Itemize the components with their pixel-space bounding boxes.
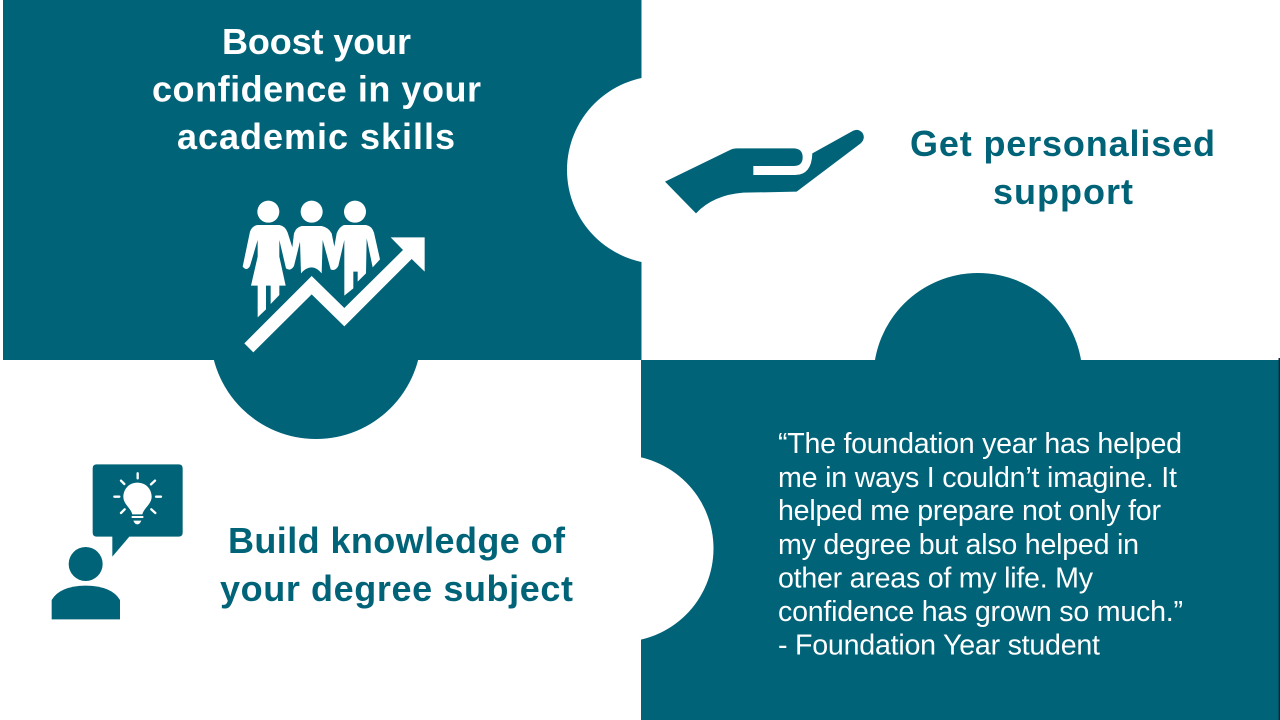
icon: person with lightbulb idea: [52, 464, 183, 619]
quote text: my degree but also helped in: [778, 529, 1139, 561]
quote text: helped me prepare not only for: [778, 495, 1161, 527]
quote text: me in ways I couldn’t imagine. It: [778, 462, 1177, 494]
quote text: other areas of my life. My: [778, 562, 1094, 594]
quote text: - Foundation Year student: [778, 630, 1100, 662]
icon: open hand: [665, 130, 864, 213]
heading: boost your confidence: academic skills: [177, 116, 455, 157]
lightbulb: [114, 473, 161, 524]
heading: personalised support: support: [993, 171, 1133, 212]
person: [52, 547, 120, 619]
heading: boost your confidence: confidence in your: [152, 68, 481, 110]
speech bubble: [93, 464, 183, 557]
quote text: confidence has grown so much.”: [778, 596, 1183, 628]
heading: boost your confidence: [152, 21, 481, 157]
panel: quote (bottom right): [526, 273, 1280, 720]
panel: confidence (top left): [3, 0, 755, 439]
heading: build knowledge: Build knowledge of: [228, 520, 566, 561]
heading: personalised support: Get personalised: [910, 123, 1215, 164]
heading: boost your confidence: Boost your: [222, 21, 411, 62]
heading: build knowledge: your degree subject: [220, 568, 573, 609]
quote text: “The foundation year has helped: [778, 428, 1182, 460]
heading: personalised support: [910, 123, 1215, 212]
quote text: [778, 428, 1183, 662]
heading: build knowledge: [220, 520, 573, 609]
icon: people with rising arrow: [243, 201, 425, 352]
